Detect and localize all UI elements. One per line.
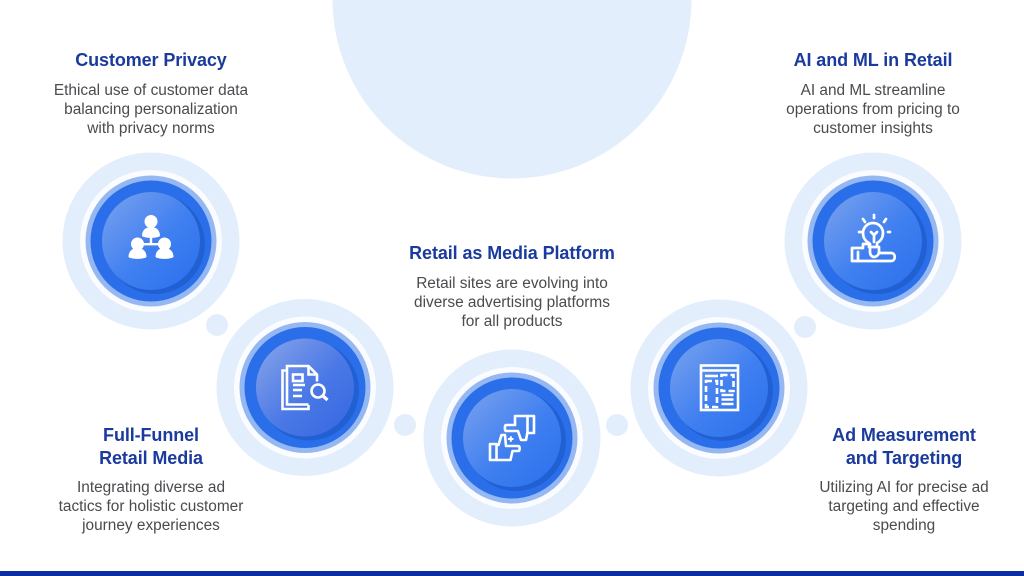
icon: documents with magnifier: [282, 366, 328, 409]
text: Full-Funnel Retail Media: journey experiences: [82, 517, 220, 534]
text: Ad Measurement and Targeting: spending: [873, 517, 935, 534]
text: Ad Measurement and Targeting: [819, 425, 989, 534]
icon: lightbulb on hand: [852, 215, 895, 261]
text: Customer Privacy: balancing personalization: [64, 100, 238, 118]
text: Ad Measurement and Targeting: and Targeting: [846, 448, 962, 468]
node: Customer Privacy: [62, 152, 240, 330]
text: Customer Privacy: with privacy norms: [87, 120, 215, 136]
text: Ad Measurement and Targeting: Utilizing AI for precise ad: [819, 479, 989, 496]
text: Full-Funnel Retail Media: Full-Funnel: [103, 425, 199, 445]
text: AI and ML in Retail: operations from pricing to: [786, 100, 960, 118]
text: Full-Funnel Retail Media: [58, 425, 244, 534]
text: Ad Measurement and Targeting: targeting and effective: [828, 498, 980, 515]
text: Full-Funnel Retail Media: Integrating diverse ad: [77, 479, 225, 496]
text: AI and ML in Retail: customer insights: [813, 120, 933, 136]
text: Customer Privacy: [54, 50, 248, 136]
node: Retail as Media Platform: [424, 350, 600, 526]
icon: people network: [128, 215, 174, 259]
text: AI and ML in Retail: [786, 50, 960, 136]
text: AI and ML in Retail: AI and ML in Retail: [794, 50, 952, 70]
text: AI and ML in Retail: AI and ML streamline: [801, 82, 945, 98]
text: Retail as Media Platform: for all products: [462, 312, 562, 330]
node: Ad Measurement and Targeting: [630, 300, 808, 476]
text: Full-Funnel Retail Media: Retail Media: [99, 448, 203, 468]
text: Retail as Media Platform: diverse advertising platforms: [414, 294, 610, 310]
text: Retail as Media Platform: [409, 243, 615, 330]
node: AI and ML in Retail: [784, 152, 962, 330]
text: Customer Privacy: Customer Privacy: [75, 50, 227, 70]
text: Full-Funnel Retail Media: tactics for holistic customer: [59, 498, 243, 515]
connector dots: [206, 314, 816, 436]
icon: thumbs up and down: [490, 416, 534, 460]
top background semicircle: [332, 0, 692, 178]
text: Retail as Media Platform: Retail sites are evolving into: [416, 274, 608, 292]
text: Customer Privacy: Ethical use of customer data: [54, 82, 248, 98]
icon: layout sheet: [701, 366, 738, 410]
text: Retail as Media Platform: Retail as Media Platform: [409, 243, 615, 263]
text: Ad Measurement and Targeting: Ad Measurement: [832, 425, 976, 445]
node: Full-Funnel Retail Media: [216, 299, 394, 476]
bottom bar: [0, 571, 1024, 576]
